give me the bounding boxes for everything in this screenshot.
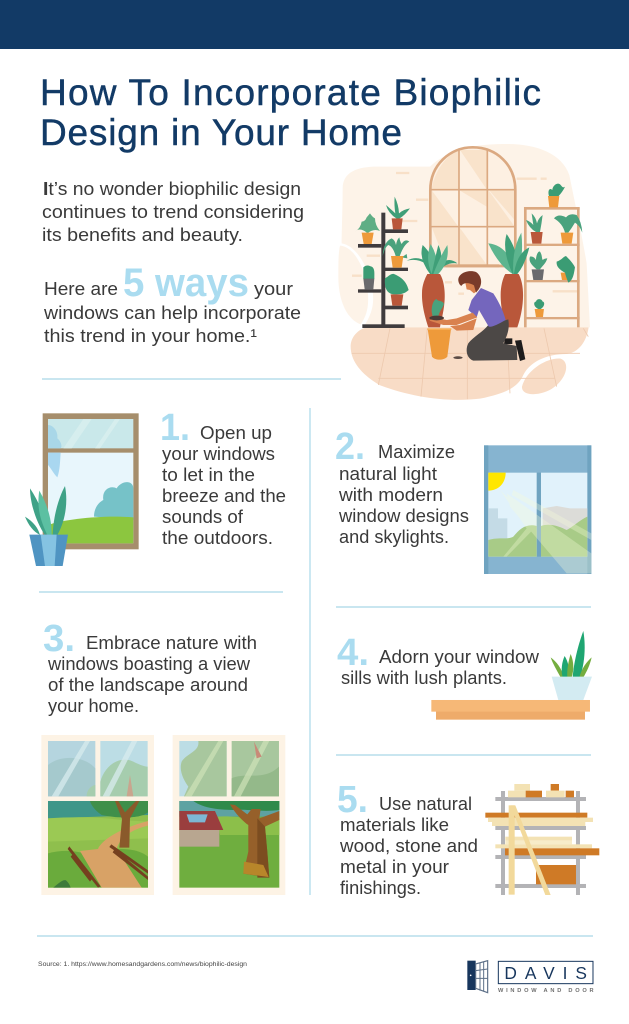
tip 3 text: your home. xyxy=(48,695,139,716)
tip 2 text: 2. xyxy=(335,426,365,468)
tip 2 text: window designs xyxy=(338,505,469,526)
callout: 5 ways: your xyxy=(254,278,293,299)
tip 3 text: Embrace nature with xyxy=(86,632,257,653)
gardener xyxy=(429,271,525,361)
tip 3 text: of the landscape around xyxy=(48,674,248,695)
tip 4 text: Adorn your window xyxy=(379,646,540,667)
tip 5 text: metal in your xyxy=(340,856,449,877)
tip 5 text: Use natural xyxy=(379,793,472,814)
tip 2 text: Maximize xyxy=(378,441,455,462)
tip 5 text: finishings. xyxy=(340,877,421,898)
top shelf blocks xyxy=(508,784,574,797)
tip 3 text: windows boasting a view xyxy=(47,653,251,674)
wall bricks xyxy=(352,173,577,294)
left blob piece xyxy=(338,246,368,324)
tip 3 text xyxy=(43,618,257,716)
tip 1 text: breeze and the xyxy=(162,485,286,506)
tip 1 text: the outdoors. xyxy=(162,527,273,548)
left plant stand xyxy=(358,213,408,328)
tip 1 text xyxy=(160,407,286,548)
window frame xyxy=(43,413,139,549)
tip 5 illustration: shelving with natural materials xyxy=(485,784,599,895)
arched window xyxy=(430,147,515,267)
tip 1 text: your windows xyxy=(162,443,275,464)
soil crumbs xyxy=(453,356,463,359)
right shelf unit xyxy=(524,207,580,327)
tip 2 text: with modern xyxy=(338,484,443,505)
tip 2 text: and skylights. xyxy=(339,526,449,547)
leaning boards xyxy=(509,805,551,895)
callout: 5 ways: Here are xyxy=(44,278,118,299)
tagline: WINDOW AND DOOR xyxy=(498,988,594,994)
orange pot with seedling xyxy=(427,299,451,360)
tip 4 text: sills with lush plants. xyxy=(341,667,507,688)
tip 4 text: 4. xyxy=(337,632,369,674)
divider xyxy=(39,591,283,593)
tip 1 text: sounds of xyxy=(162,506,244,527)
floor xyxy=(351,327,589,400)
divider xyxy=(336,754,591,756)
center vertical rule xyxy=(309,408,311,895)
callout: 5 ways xyxy=(43,261,301,346)
large left planter xyxy=(407,244,457,327)
tip 1 illustration: open window with plant xyxy=(25,413,139,566)
source note: Source: 1. https://www.homesandgardens.com/news/biophilic-design xyxy=(38,961,247,968)
intro text xyxy=(42,178,304,245)
tip 4 text xyxy=(337,632,540,688)
intro text: its benefits and beauty. xyxy=(42,224,243,245)
icon: door xyxy=(467,961,488,993)
tip 3 illustrations: landscape windows xyxy=(41,735,285,895)
tip 5 text: 5. xyxy=(337,779,368,821)
divider xyxy=(42,378,341,380)
tip 2 illustration: modern window with sunlight xyxy=(484,445,591,574)
tip 5 text xyxy=(337,779,478,898)
sill xyxy=(431,700,590,720)
callout: 5 ways: windows can help incorporate xyxy=(43,302,301,323)
leaves xyxy=(551,631,592,677)
intro text: It’s no wonder biophilic design xyxy=(43,178,301,199)
plants on right shelf xyxy=(526,184,582,317)
tip 3 text: 3. xyxy=(43,618,75,660)
glass panes xyxy=(488,473,587,557)
title: How To Incorporate Biophilic xyxy=(40,72,541,113)
logo: Davis Window and Door xyxy=(467,961,594,994)
logo box xyxy=(498,961,593,984)
callout: 5 ways: this trend in your home.¹ xyxy=(44,325,257,346)
background blob xyxy=(342,144,590,327)
title xyxy=(40,72,541,153)
sun xyxy=(488,473,506,491)
callout: 5 ways: 5 ways xyxy=(123,261,249,305)
tip 1 text: to let in the xyxy=(162,464,255,485)
light beams xyxy=(500,490,591,573)
plants on left stand xyxy=(355,197,410,306)
tip 1 text: 1. xyxy=(160,407,190,449)
wordmark: DAVIS xyxy=(504,963,587,983)
left window xyxy=(41,735,154,895)
potted plant xyxy=(25,486,68,566)
header band xyxy=(0,0,629,49)
tip 4 illustration: plant on window sill xyxy=(431,631,592,720)
large right planter xyxy=(488,233,529,327)
tip 5 text: materials like xyxy=(340,814,449,835)
window frame xyxy=(484,445,591,574)
intro text: continues to trend considering xyxy=(42,201,304,222)
title: Design in Your Home xyxy=(40,112,402,153)
divider xyxy=(336,606,591,608)
tip 1 text: Open up xyxy=(200,422,272,443)
tip 5 text: wood, stone and xyxy=(339,835,478,856)
metal rack xyxy=(495,791,586,895)
tip 2 text: natural light xyxy=(339,463,437,484)
floor patch xyxy=(522,359,566,394)
divider xyxy=(37,935,593,937)
hero illustration: person potting plants xyxy=(338,144,590,400)
floor tiles xyxy=(352,328,588,399)
middle planks xyxy=(485,813,599,884)
tip 2 text xyxy=(335,426,469,547)
window glass xyxy=(48,419,133,543)
right window xyxy=(173,735,285,895)
glass pot xyxy=(552,677,592,700)
frame sides xyxy=(484,445,591,574)
